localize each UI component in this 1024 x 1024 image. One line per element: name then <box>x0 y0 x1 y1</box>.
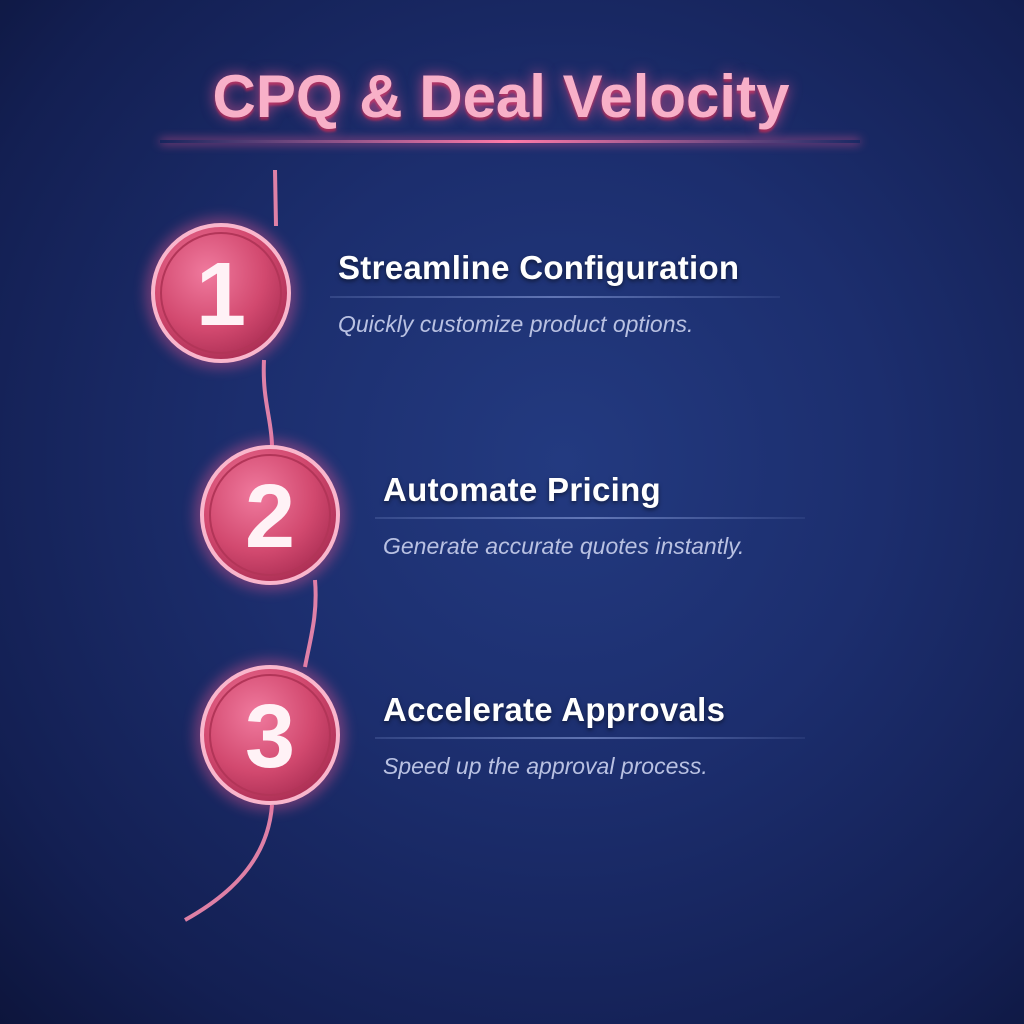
step circles <box>145 217 346 811</box>
title: CPQ & Deal Velocity <box>213 63 789 130</box>
step 3 text <box>375 691 805 779</box>
step 1 text: Streamline Configuration <box>338 249 739 286</box>
step circles: 1 <box>196 245 246 345</box>
title underline glow <box>160 140 860 143</box>
step 2 text <box>375 471 805 559</box>
step circles: 2 <box>245 467 295 567</box>
step 2 text: Automate Pricing <box>383 471 661 508</box>
step 1 text: Quickly customize product options. <box>338 311 693 337</box>
step 1 text <box>330 249 780 337</box>
step 2 text: Generate accurate quotes instantly. <box>383 533 744 559</box>
step 3 text: Accelerate Approvals <box>383 691 725 728</box>
step 3 text: Speed up the approval process. <box>383 753 708 779</box>
step circles: 3 <box>245 687 295 787</box>
